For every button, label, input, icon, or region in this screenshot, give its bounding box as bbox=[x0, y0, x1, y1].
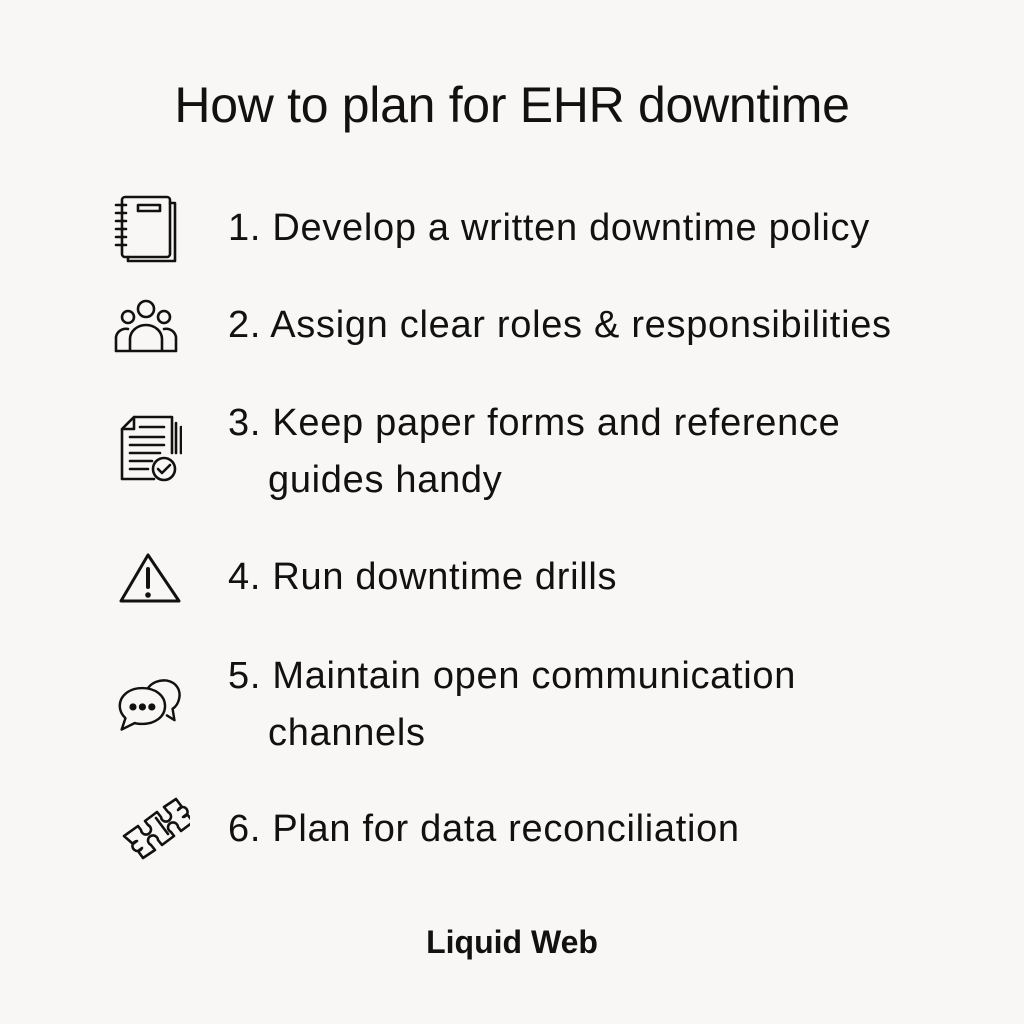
icon: notebook bbox=[114, 196, 176, 262]
icon: warning bbox=[119, 553, 180, 602]
icon: documents check bbox=[120, 416, 182, 482]
title: How to plan for EHR downtime bbox=[174, 77, 850, 133]
item 5: 5. Maintain open communication bbox=[228, 655, 796, 697]
item 3: 3. Keep paper forms and reference bbox=[228, 402, 840, 444]
item 5 bbox=[228, 655, 796, 754]
item 6: 6. Plan for data reconciliation bbox=[228, 808, 740, 850]
item 2: 2. Assign clear roles & responsibilities bbox=[228, 304, 892, 346]
icon: puzzle bbox=[122, 798, 190, 860]
icon: people bbox=[114, 300, 178, 352]
icon: chat bubbles bbox=[118, 679, 181, 731]
item 3 bbox=[228, 402, 840, 501]
item 3: guides handy bbox=[268, 459, 502, 501]
footer brand: Liquid Web bbox=[426, 924, 598, 960]
item 1: 1. Develop a written downtime policy bbox=[228, 207, 870, 249]
item 5: channels bbox=[268, 712, 426, 754]
item 4: 4. Run downtime drills bbox=[228, 556, 617, 598]
